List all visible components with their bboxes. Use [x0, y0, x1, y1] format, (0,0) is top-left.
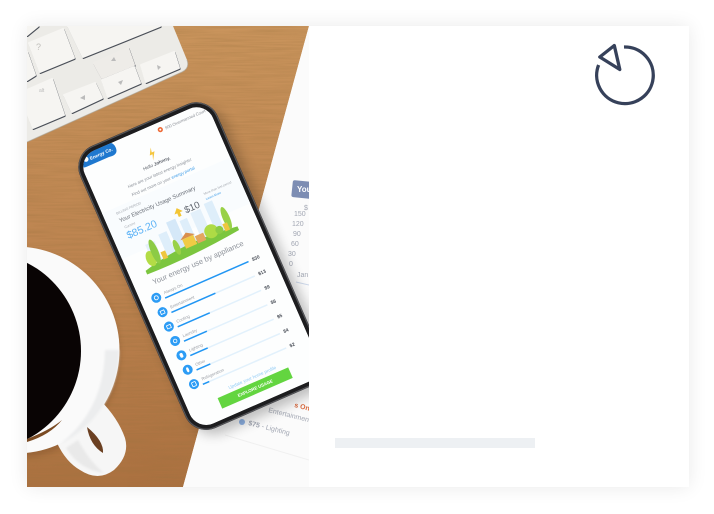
lightning bolt — [150, 148, 154, 160]
summary: Learn More — [205, 191, 222, 201]
keyboard — [27, 26, 188, 142]
chart page on paper: 0 — [289, 261, 293, 268]
location: 900 Overmanned Court — [164, 108, 207, 130]
city illustration — [146, 200, 239, 274]
row: always on — [151, 255, 260, 303]
chart page on paper: 30 — [288, 251, 296, 258]
greeting: Here are your latest energy insights! — [127, 157, 192, 189]
phone shadow — [82, 102, 309, 440]
row: refrigeration: Refrigeration — [201, 367, 225, 381]
row: entertainment — [158, 270, 266, 318]
summary: BILLING PERIOD — [116, 201, 142, 216]
phone — [78, 102, 309, 430]
row: refrigeration — [189, 342, 296, 390]
key: left arrow — [64, 83, 102, 112]
row: always on: $30 — [251, 254, 261, 263]
row: laundry — [170, 300, 276, 346]
key: question mark — [29, 29, 74, 72]
summary: More than last period — [203, 180, 232, 196]
chart page on paper: Jan — [297, 272, 308, 279]
row: other — [182, 328, 289, 375]
row: lighting — [176, 314, 282, 360]
row: other: $4 — [283, 327, 290, 335]
cup body — [27, 247, 120, 453]
key: alt: alt — [39, 88, 45, 94]
explore usage button — [218, 367, 293, 409]
coffee — [27, 262, 81, 442]
row: other: Other — [194, 358, 207, 367]
key: question mark: ? — [36, 42, 41, 52]
chart page on paper: $ — [304, 205, 308, 212]
chart page on paper: You — [297, 185, 312, 194]
wood desk surface — [27, 26, 309, 487]
key: right arrow — [141, 52, 179, 82]
cup handle — [57, 400, 126, 476]
key: up arrow — [94, 48, 134, 78]
key: down arrow — [102, 67, 140, 97]
row: entertainment: $13 — [257, 269, 267, 277]
row: lighting: Lighting — [188, 342, 204, 353]
greeting: Hello Johnny, — [142, 155, 171, 172]
summary: $10 — [183, 200, 202, 216]
bars: energy use by appliance — [150, 249, 299, 393]
chart page on paper: 150 — [294, 211, 306, 218]
key: side — [27, 52, 35, 80]
icon: pie chart — [597, 46, 653, 104]
photo: desk scene — [27, 26, 309, 487]
chart page on paper: $75 - Lighting — [248, 420, 290, 437]
key: top wide — [68, 26, 160, 57]
summary: Your Electricity Usage Summary — [119, 186, 197, 224]
chart page on paper: 120 — [292, 221, 304, 228]
row: always on: Always On — [163, 282, 184, 295]
coffee cup — [27, 247, 126, 476]
chart page on paper: s On — [294, 402, 310, 413]
row: refrigeration: $2 — [289, 342, 296, 349]
summary: Current — [124, 221, 136, 229]
row: cooling — [164, 285, 270, 332]
summary — [116, 181, 232, 239]
placeholder text bar — [335, 438, 535, 448]
energy co badge: Energy Co. — [89, 147, 113, 161]
update profile link: Update your home profile — [228, 365, 277, 390]
row: cooling: Cooling — [176, 313, 191, 324]
explore usage button: EXPLORE USAGE — [237, 378, 274, 398]
row: cooling: $9 — [264, 284, 271, 292]
paper sheet — [183, 26, 317, 487]
energy co badge — [83, 143, 116, 168]
row: entertainment: Entertainment — [169, 294, 196, 309]
chart page on paper — [225, 180, 317, 460]
key: alt — [27, 79, 64, 128]
row: lighting: $5 — [276, 313, 284, 321]
phone screen — [83, 107, 309, 425]
chart page on paper: 60 — [291, 241, 299, 248]
greeting: Find out more on your energy portal — [131, 165, 196, 197]
appliance heading: Your energy use by appliance — [151, 239, 245, 287]
summary band — [102, 157, 250, 259]
chart page on paper: 90 — [293, 231, 301, 238]
key: corner — [27, 26, 38, 35]
summary: $85.20 — [125, 218, 159, 242]
chart page on paper: Entertainment — [268, 407, 312, 424]
row: laundry: $6 — [270, 298, 278, 306]
phone body — [78, 102, 309, 430]
row: laundry: Laundry — [182, 327, 199, 338]
